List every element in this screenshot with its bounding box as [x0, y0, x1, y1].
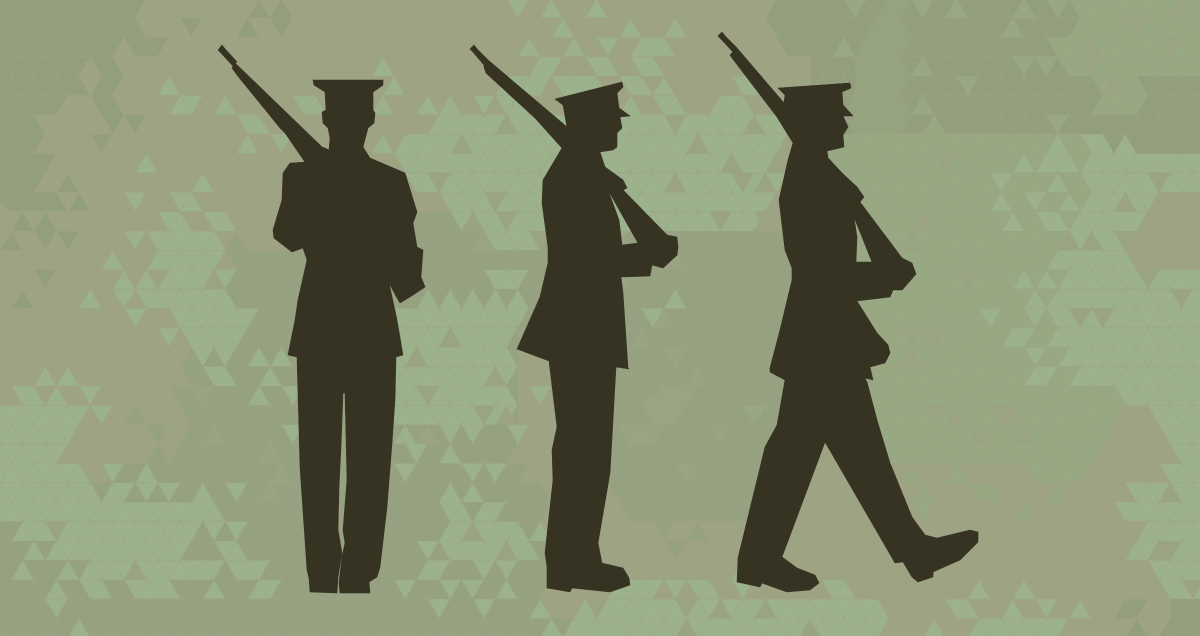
rifle on shoulder [218, 45, 329, 165]
soldier 2: standing, side view [470, 45, 678, 592]
rifle on shoulder [470, 45, 567, 148]
body silhouette [273, 80, 425, 593]
soldier 1: standing, seen from behind [218, 45, 425, 593]
rifle on shoulder [718, 32, 784, 117]
soldier 3: marching, side view [718, 32, 978, 592]
body silhouette with striding legs [737, 83, 978, 592]
body silhouette with rifle stock and arm [517, 82, 678, 592]
